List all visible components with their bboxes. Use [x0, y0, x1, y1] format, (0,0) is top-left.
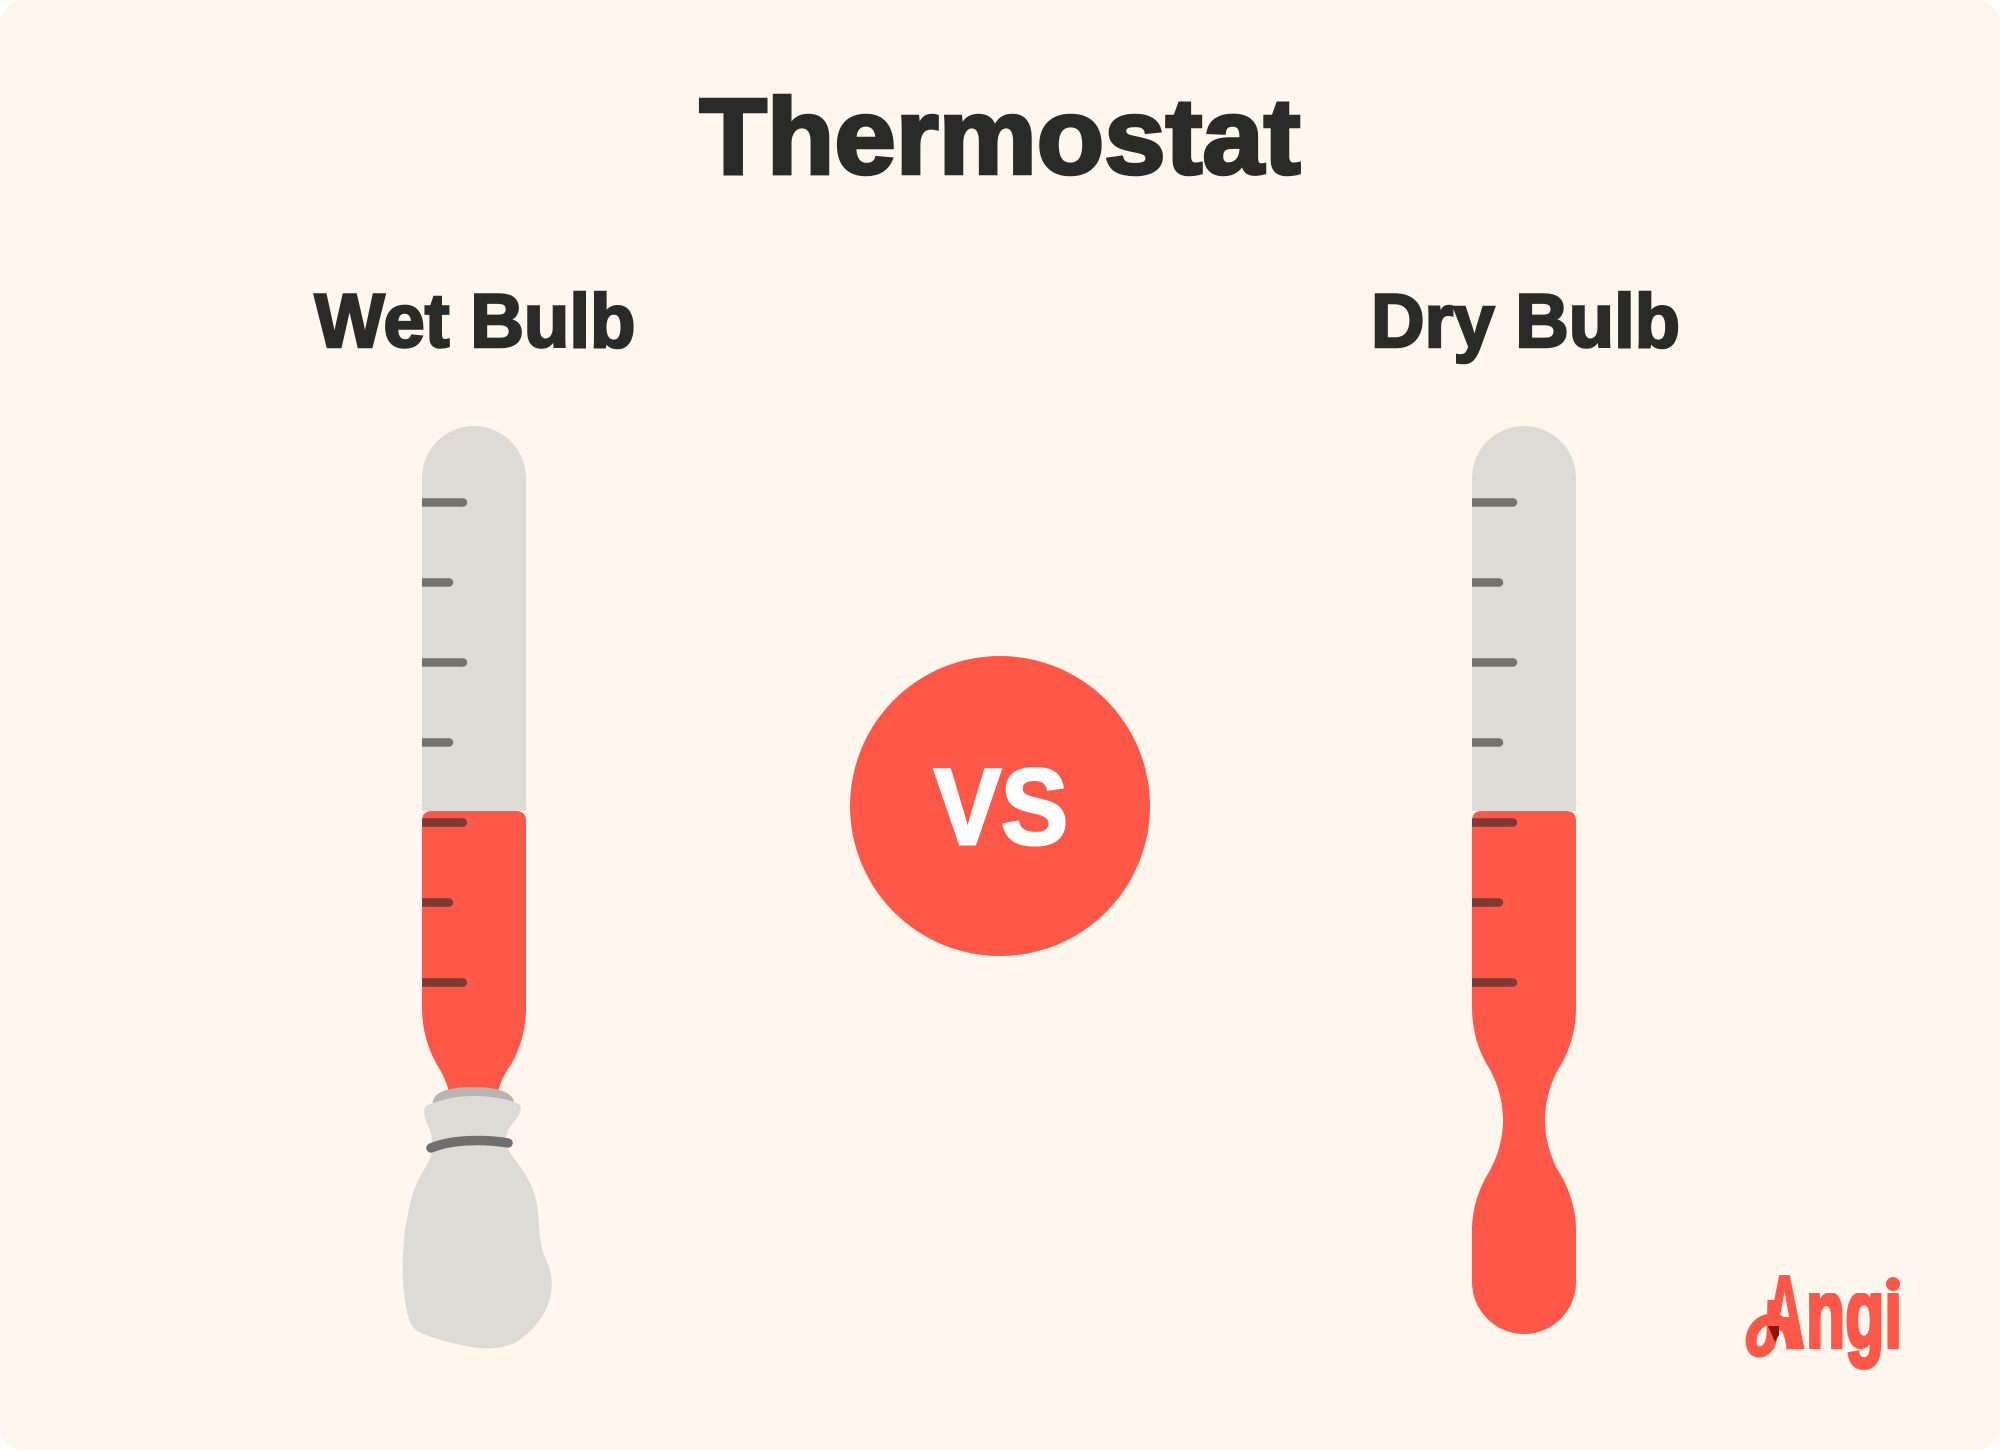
- dry tube: [1472, 426, 1576, 811]
- wet mercury: [422, 811, 526, 1092]
- wet sock cap: [433, 1087, 514, 1103]
- vs badge: [850, 656, 1150, 956]
- heading: dry bulb: Dry Bulb: [1371, 279, 1680, 364]
- heading: wet bulb: Wet Bulb: [314, 279, 636, 364]
- vs circle: [850, 656, 1150, 956]
- dry mercury and bulb: [1472, 811, 1576, 1340]
- title: Thermostat: [700, 76, 1300, 196]
- vs label: VS: [934, 746, 1068, 867]
- wet tick marks: [422, 498, 467, 987]
- wet bulb thermometer: [403, 426, 552, 1348]
- logo wordmark remainder: ngi: [1806, 1258, 1902, 1368]
- logo dot: [1886, 1277, 1900, 1291]
- logo loop shadow: [1768, 1326, 1779, 1342]
- wet sock tie band: [431, 1141, 508, 1148]
- dry tick marks: [1472, 498, 1517, 987]
- dry bulb thermometer: [1472, 426, 1576, 1340]
- wet sock: [403, 1096, 552, 1348]
- angi logo: [1746, 1275, 1900, 1370]
- wet tube: [422, 426, 526, 811]
- logo wordmark: A: [1764, 1255, 1805, 1371]
- logo loop: [1751, 1300, 1792, 1352]
